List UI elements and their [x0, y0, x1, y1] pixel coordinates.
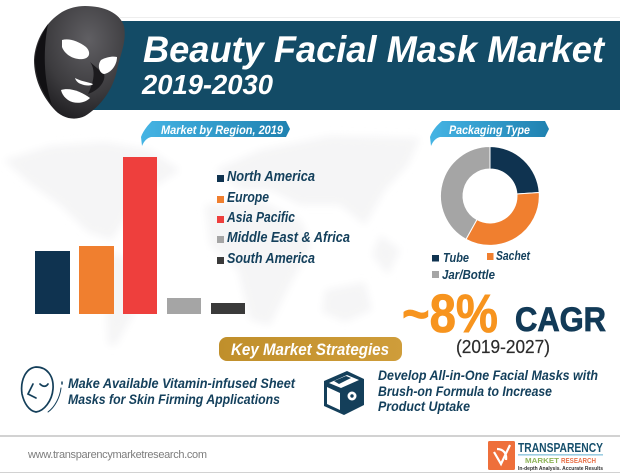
website url: www.transparencymarketresearch.com: [27, 449, 207, 461]
icon: face outline: [22, 367, 62, 412]
strategy text: left: Make Available Vitamin-infused Sheet: [68, 375, 296, 391]
legend: packaging: [432, 248, 531, 282]
icon: box with gear: [324, 371, 364, 415]
legend: packaging: Jar/Bottle: [442, 267, 495, 282]
subtitle years: 2019-2030: [141, 69, 273, 100]
bar chart: market by region: [35, 157, 245, 314]
strategy text: right: Brush-on Formula to Increase: [378, 383, 552, 399]
CAGR callout: ~8%: [402, 284, 498, 344]
logo: transparency market research: RESEARCH: [561, 456, 596, 465]
legend: packaging: Sachet: [496, 248, 531, 263]
title banner: [92, 21, 620, 110]
logo: transparency market research: MARKET: [525, 456, 559, 465]
strategy text: right: Product Uptake: [378, 398, 470, 414]
title: Beauty Facial Mask Market: [143, 29, 606, 70]
world map background: [4, 136, 420, 345]
logo: transparency market research: In-depth Analysis. Accurate Results: [518, 466, 603, 472]
legend: regions: Middle East & Africa: [227, 230, 350, 246]
footer rules: [0, 435, 620, 473]
legend: packaging: Tube: [443, 250, 469, 265]
strategy text: left: [68, 375, 296, 407]
ribbon: market by region: [141, 121, 290, 146]
strategy text: left: Masks for Skin Firming Applications: [68, 391, 280, 407]
icon: black face mask: [34, 6, 125, 119]
heading: key market strategies: Key Market Strategies: [231, 340, 389, 359]
legend: regions: Asia Pacific: [226, 210, 295, 226]
ribbon: packaging type: Packaging Type: [449, 125, 531, 137]
strategy text: right: Develop All-in-One Facial Masks with: [378, 367, 598, 383]
CAGR callout: CAGR: [515, 301, 606, 339]
ribbon: packaging type: [430, 121, 549, 146]
legend: regions: North America: [227, 169, 315, 185]
legend: regions: [217, 169, 350, 267]
legend: regions: South America: [227, 251, 315, 267]
CAGR callout: (2019-2027): [456, 337, 550, 357]
donut chart: packaging type: [440, 146, 539, 245]
CAGR callout: [402, 284, 606, 357]
ribbon: market by region: Market by Region, 2019: [161, 125, 284, 137]
logo: transparency market research: [488, 440, 603, 472]
top rule: [120, 17, 620, 18]
strategy text: right: [378, 367, 598, 414]
legend: regions: Europe: [227, 190, 269, 206]
